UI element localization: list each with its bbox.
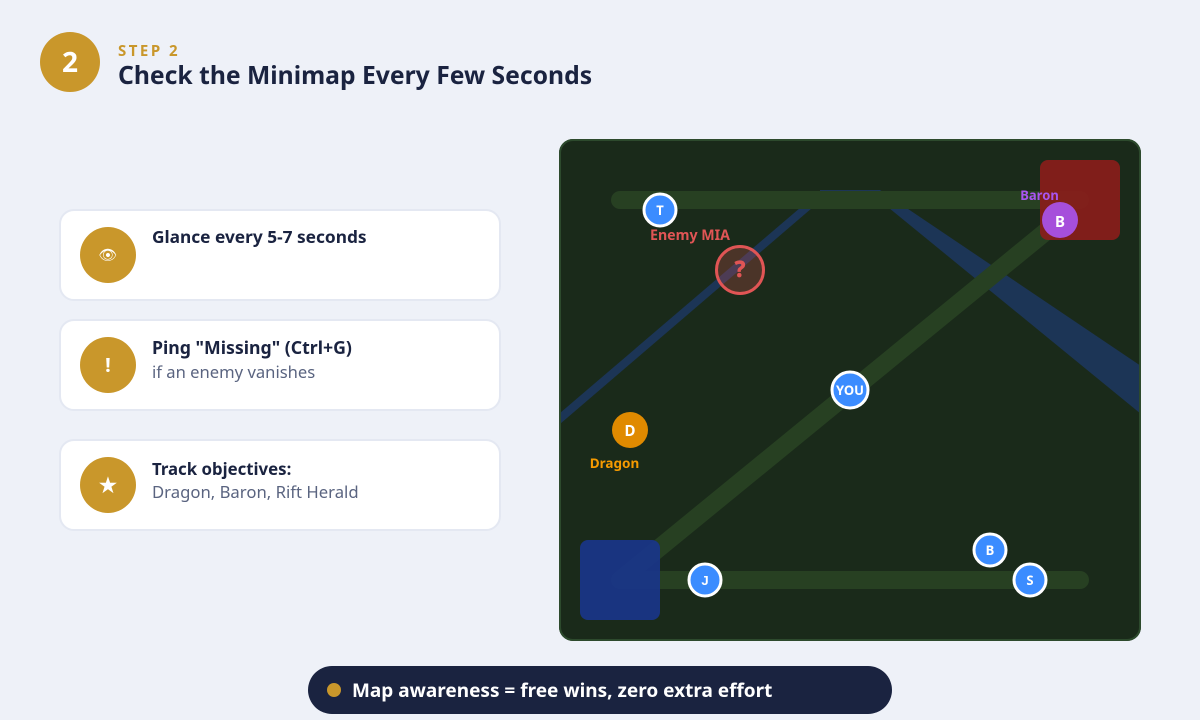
marker: you xyxy=(832,372,868,408)
card heading: glance: Glance every 5-7 seconds xyxy=(152,226,367,249)
lane: bottom xyxy=(620,571,1080,589)
lane: top xyxy=(620,191,1080,209)
marker: jungler: J xyxy=(701,573,709,588)
takeaway pill xyxy=(308,666,892,714)
enemy missing marker xyxy=(716,246,764,294)
river: north-east band xyxy=(867,190,1141,414)
marker: baron xyxy=(1042,202,1078,238)
card: glance xyxy=(59,209,501,301)
pill text: Map awareness = free wins, zero extra effort xyxy=(352,677,772,703)
card heading: objectives: Track objectives: xyxy=(152,457,291,480)
card: objectives xyxy=(59,439,501,531)
icon: star xyxy=(80,457,136,513)
step number badge xyxy=(40,32,100,92)
icon: exclamation xyxy=(80,337,136,393)
step label: STEP 2 xyxy=(118,41,180,61)
marker: dragon xyxy=(612,412,648,448)
marker: jungler xyxy=(689,564,721,596)
card: ping xyxy=(59,319,501,411)
marker: bot: B xyxy=(986,541,994,559)
marker: bot xyxy=(974,534,1006,566)
card text: objectives: Dragon, Baron, Rift Herald xyxy=(152,480,359,503)
red base xyxy=(1040,160,1120,240)
marker: you: YOU xyxy=(836,381,864,399)
minimap xyxy=(559,139,1141,641)
map ground xyxy=(559,139,1141,641)
icon: star: ★ xyxy=(99,471,117,498)
label: dragon: Dragon xyxy=(590,454,639,472)
enemy missing marker: ? xyxy=(735,254,746,284)
title: Check the Minimap Every Few Seconds xyxy=(118,59,592,92)
map border xyxy=(560,140,1140,640)
card heading: ping: Ping "Missing" (Ctrl+G) xyxy=(152,336,352,360)
icon: eye xyxy=(80,227,136,283)
marker: top laner: T xyxy=(656,201,664,219)
river: top segment xyxy=(820,190,868,191)
blue base xyxy=(580,540,660,620)
marker: baron: B xyxy=(1055,212,1065,232)
label: enemy MIA: Enemy MIA xyxy=(650,226,730,245)
label: baron: Baron xyxy=(1020,186,1059,204)
marker: support: S xyxy=(1026,571,1034,589)
pill dot xyxy=(327,683,341,697)
card text: ping: if an enemy vanishes xyxy=(152,360,315,383)
marker: dragon: D xyxy=(625,421,636,441)
marker: top laner xyxy=(644,194,676,226)
lane: mid xyxy=(654,225,1050,559)
marker: support xyxy=(1014,564,1046,596)
river: north-west band xyxy=(561,209,811,423)
icon: exclamation: ! xyxy=(105,351,111,378)
icon: eye: 👁 xyxy=(98,245,118,265)
step number badge: 2 xyxy=(62,43,78,81)
